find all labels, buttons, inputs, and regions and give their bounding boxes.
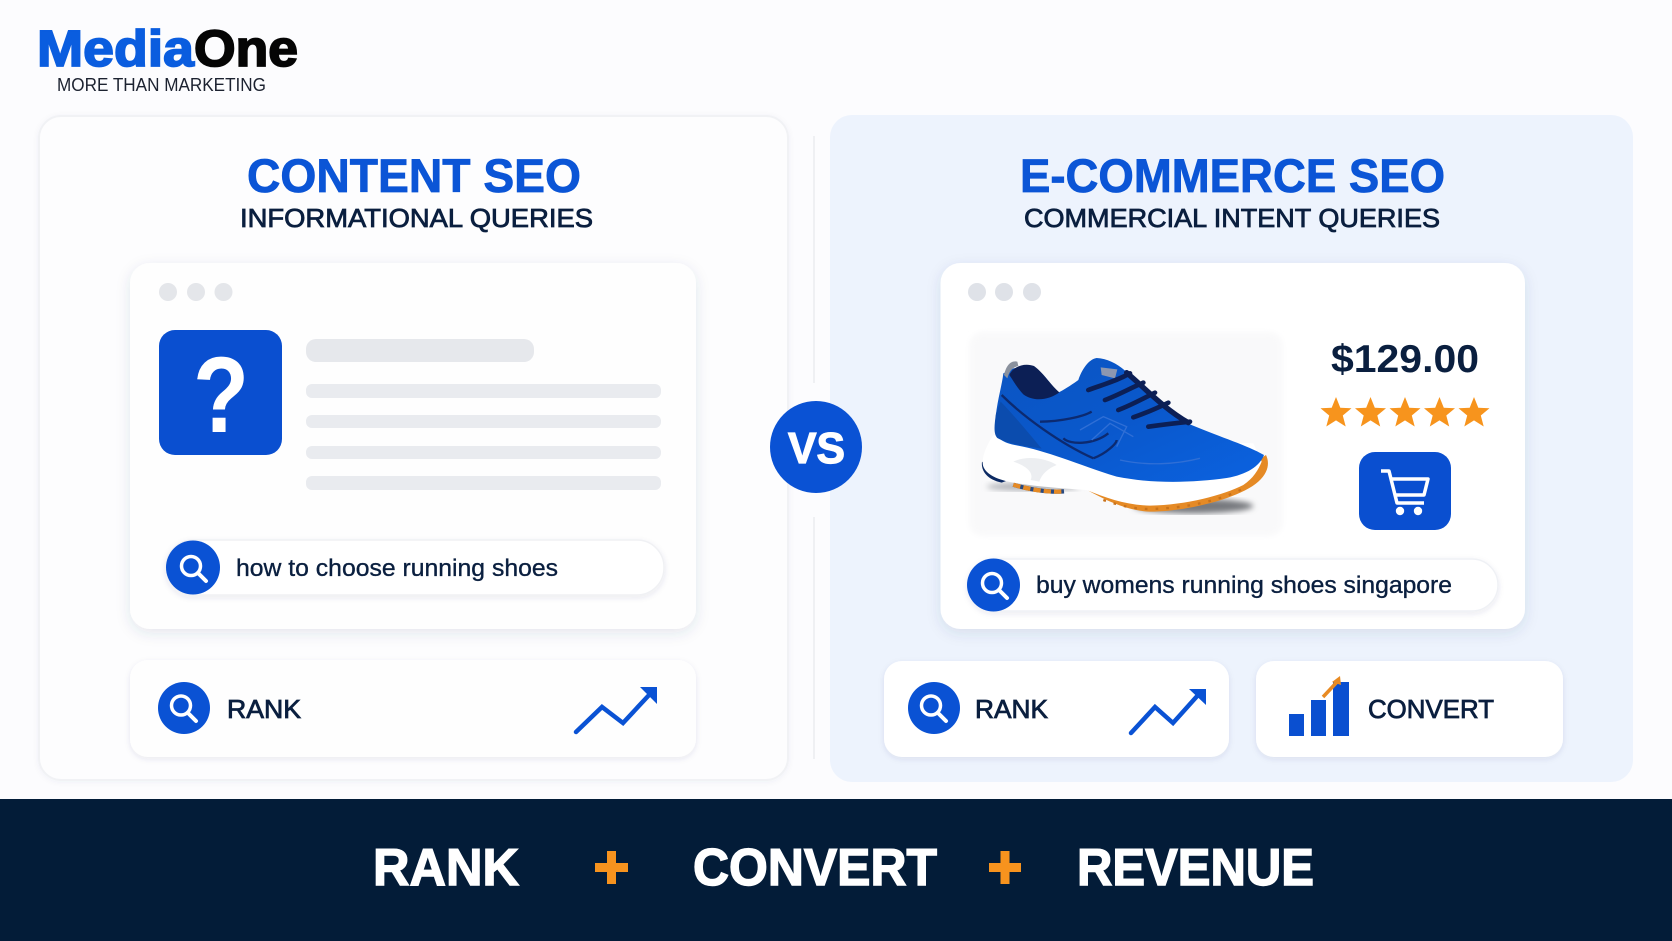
subheading: informational queries: INFORMATIONAL QUERIES: [240, 203, 593, 233]
vs badge: VS: [788, 424, 845, 473]
formula: convert: CONVERT: [693, 839, 937, 897]
product image: running shoe: [969, 332, 1283, 536]
logo: MORE THAN MARKETING: [57, 75, 266, 95]
search bar: commercial query: [967, 558, 1498, 612]
icon: search: [908, 682, 960, 734]
search bar: informational query: how to choose running shoes: [236, 555, 558, 582]
divider line: [813, 136, 815, 759]
convert card: [1256, 661, 1563, 757]
logo: [37, 20, 298, 95]
arrow: rising trend: [576, 687, 657, 732]
rating stars: [1320, 397, 1490, 426]
heading: e-commerce SEO: E-COMMERCE SEO: [1020, 149, 1445, 202]
label: rank: RANK: [975, 694, 1049, 724]
logo: One: [194, 20, 298, 77]
icon: shopping cart: [1359, 452, 1451, 530]
rank card: content: [130, 660, 696, 757]
panel: content SEO: [39, 116, 788, 780]
icon: bar chart: [1289, 676, 1349, 736]
browser card: article: [130, 263, 696, 629]
formula: rank: RANK: [373, 839, 519, 897]
browser dots: [159, 283, 232, 301]
arrow: rising trend: [1131, 689, 1206, 733]
vs badge: [770, 401, 862, 493]
label: convert: CONVERT: [1368, 694, 1494, 724]
search bar: commercial query: buy womens running shoes singapore: [1036, 572, 1452, 599]
footer banner: [0, 799, 1672, 941]
subheading: commercial intent queries: COMMERCIAL INTENT QUERIES: [1024, 203, 1440, 233]
price: $129.00: [1331, 338, 1479, 381]
formula: revenue: REVENUE: [1077, 839, 1314, 897]
icon: question mark: [159, 330, 282, 455]
icon: question mark: ?: [193, 334, 249, 455]
browser dots: [968, 283, 1041, 301]
label: rank: RANK: [227, 694, 302, 724]
browser card: product: [940, 263, 1525, 629]
heading: content SEO: CONTENT SEO: [247, 149, 581, 202]
icon: search: [158, 682, 210, 734]
logo: Media: [37, 20, 195, 77]
plus sign: [989, 851, 1021, 884]
rank card: e-commerce: [884, 661, 1229, 757]
panel: e-commerce SEO: [830, 115, 1633, 782]
placeholder text lines: [306, 339, 661, 490]
plus sign: [595, 851, 628, 884]
search bar: informational query: [166, 540, 664, 595]
